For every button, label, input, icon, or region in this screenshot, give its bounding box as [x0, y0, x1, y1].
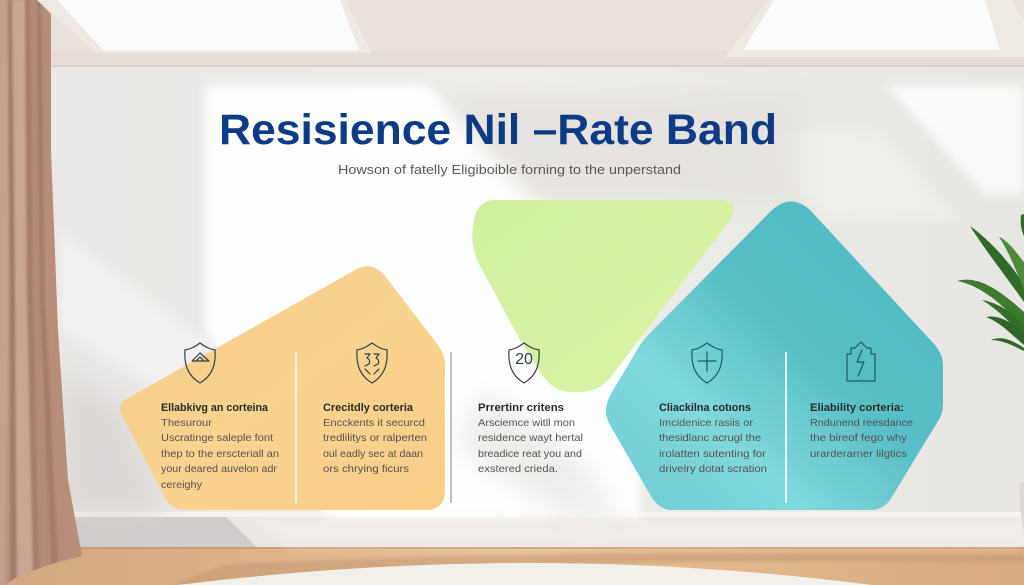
body text: the bireof fego why	[810, 432, 908, 444]
body text: thep to the erscteriall an	[161, 448, 279, 460]
column 5	[810, 342, 913, 460]
icon: building with lightning	[847, 342, 875, 381]
body text: tredlilitys or ralperten	[323, 432, 427, 444]
body text: your deared auvelon adr	[161, 463, 277, 475]
panel: green shape	[472, 200, 734, 392]
body text	[323, 417, 427, 475]
body text	[810, 417, 913, 460]
body text: irolatten sutenting for	[659, 448, 767, 460]
heading: Crecitdly corteria	[323, 402, 414, 414]
heading: Eliability corteria:	[810, 402, 904, 414]
panel: orange shape	[120, 266, 445, 510]
body text: ors chrying ficurs	[323, 463, 409, 475]
body text: breadice reat you and	[478, 448, 582, 460]
curtain	[0, 0, 82, 585]
body text	[478, 417, 583, 475]
icon: shield with triangle	[185, 343, 215, 383]
plant pot	[1020, 482, 1024, 533]
plant leaves	[957, 214, 1024, 351]
body text: oul eadly sec at daan	[323, 448, 423, 460]
body text: thesidlanc acrugl the	[659, 432, 761, 444]
body text: Imcidenice rasiis or	[659, 417, 754, 429]
column 3	[478, 343, 583, 475]
body text: Encckents it securcd	[323, 417, 425, 429]
column 2	[323, 343, 427, 475]
rug	[178, 563, 872, 585]
body text: cereighy	[161, 479, 203, 491]
divider	[450, 352, 452, 503]
icon: shield with 20: 20	[515, 351, 533, 368]
floor shadow	[170, 553, 1024, 585]
heading: Prrertinr critens	[478, 402, 564, 414]
divider	[295, 352, 297, 503]
icon: shield with numerals	[357, 343, 387, 383]
heading: Cliackilna cotıons	[659, 402, 751, 414]
sunlight on wall	[60, 85, 1024, 548]
column 4	[659, 343, 767, 475]
body text: drivelry dotat scration	[659, 463, 767, 475]
plant	[957, 214, 1024, 533]
body text: exstered crieda.	[478, 463, 558, 475]
divider	[785, 352, 787, 503]
column 1	[161, 343, 279, 491]
body text	[161, 417, 279, 491]
body text: Arsciemce witll mon	[478, 417, 575, 429]
body text	[659, 417, 767, 475]
body text: urarderarner lilgtics	[810, 448, 907, 460]
body text: Thesurour	[161, 417, 213, 429]
body text: Rndunend reesdance	[810, 417, 913, 429]
wall shadow	[60, 95, 800, 516]
subtitle: Howson of fatelly Eligiboible forning to the unperstand	[338, 162, 681, 177]
skylight left	[57, 0, 359, 50]
title: Resisience Nil –Rate Band	[219, 106, 777, 154]
body text: Uscratinge saleple font	[161, 432, 273, 444]
panel: teal shape	[606, 201, 943, 510]
body text: residence wayt hertal	[478, 432, 583, 444]
skylight right	[743, 0, 1000, 50]
icon: shield with plus	[692, 343, 722, 383]
heading: Ellabkivg an corteina	[161, 402, 269, 414]
